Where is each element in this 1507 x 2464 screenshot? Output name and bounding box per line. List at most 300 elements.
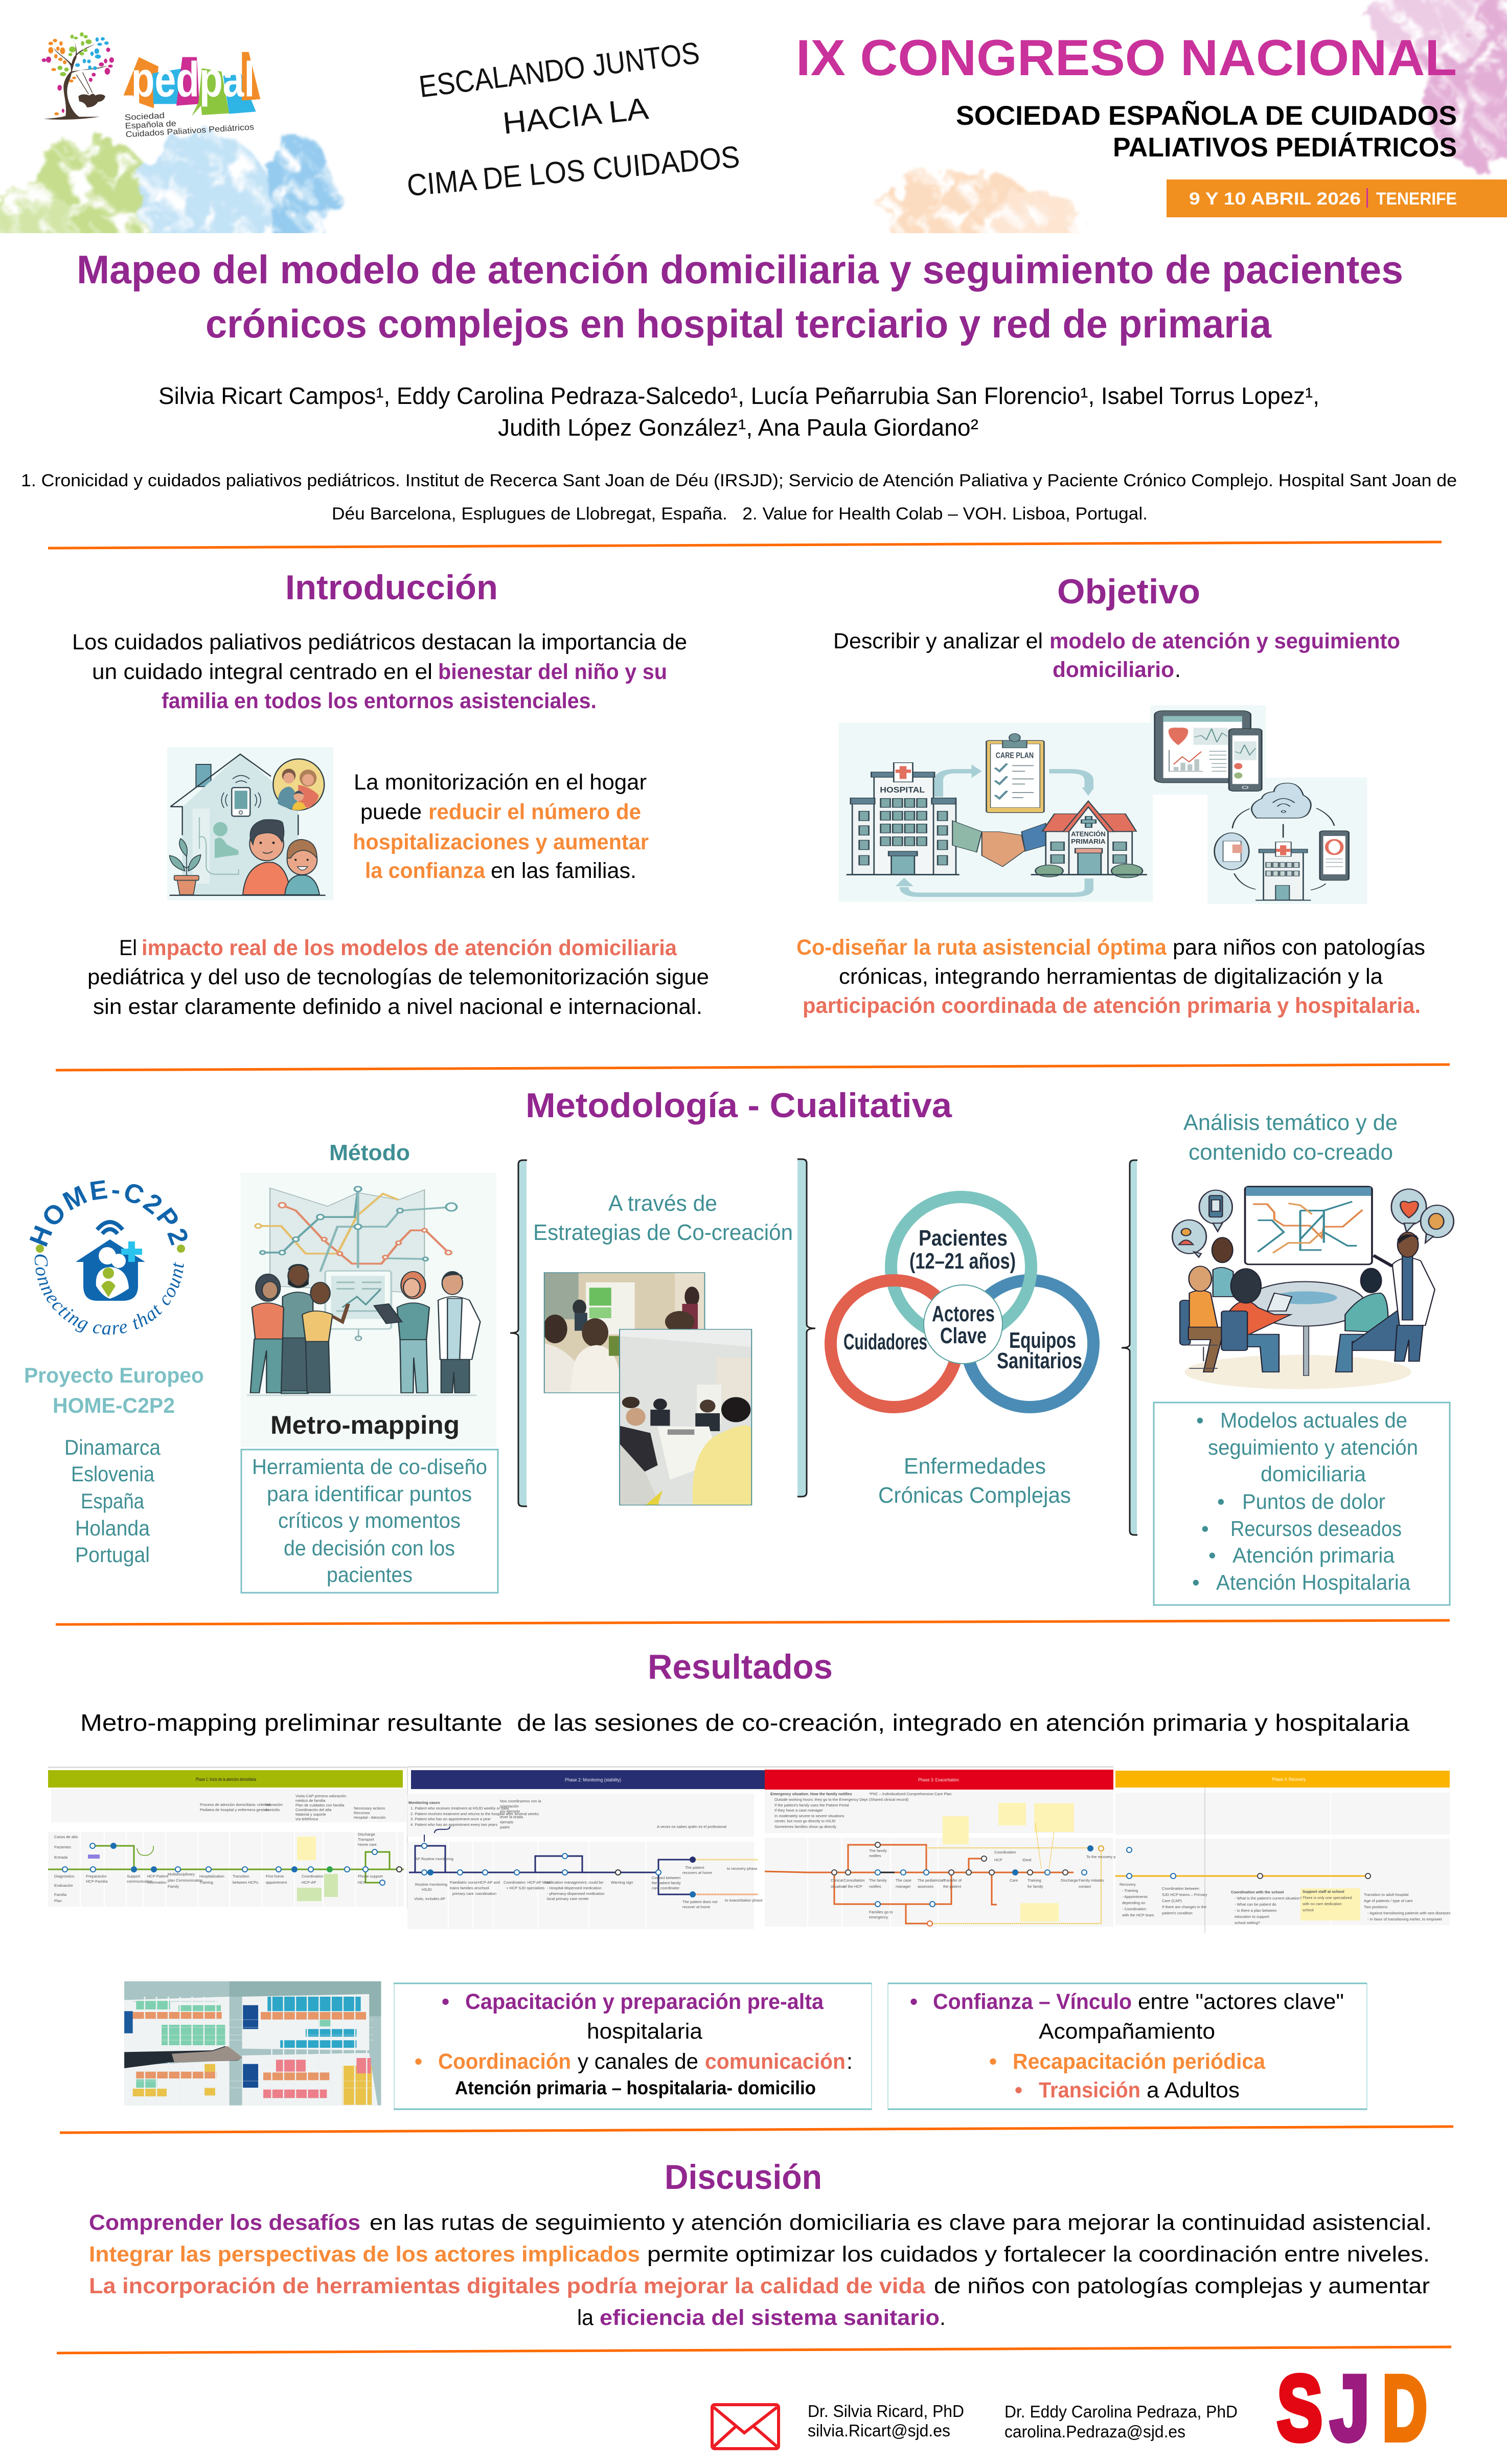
discussion text: la <box>577 2305 593 2330</box>
table <box>1245 1282 1365 1375</box>
phase 3: for family <box>1028 1884 1043 1889</box>
affiliations <box>21 471 1457 524</box>
phase 3: *PIIC – Individualized Comprehensive Care Plan <box>869 1792 951 1796</box>
phase 2: - Hospital-dispensed medication <box>547 1886 602 1890</box>
phase 1: Evaluación <box>54 1883 73 1888</box>
codesign paragraph: para niños con patologías <box>1173 935 1425 960</box>
phase 4: Transition to adult hospital <box>1364 1892 1409 1897</box>
phase 3: Emergency situation. How the family notifies <box>770 1792 852 1796</box>
box: co-design tool <box>241 1450 498 1593</box>
box: trust and recapacitation: Acompañamiento <box>1039 2019 1215 2044</box>
heading: Metodología: Metodología - Cualitativa <box>526 1086 952 1125</box>
box: training and coordination: • <box>415 2049 422 2074</box>
phase 2: 4. Patient who has an appointment every two years <box>410 1822 497 1827</box>
box: trust and recapacitation <box>888 1983 1367 2110</box>
phase 1 <box>48 1767 406 1907</box>
society name: PALIATIVOS PEDIÁTRICOS <box>1113 132 1457 163</box>
box: co-design tool: pacientes <box>327 1563 413 1587</box>
logo: Pedpal: pedpal <box>131 52 255 107</box>
care plan clipboard: CARE PLAN <box>996 752 1034 760</box>
phase 1: HCP <box>358 1880 366 1885</box>
objective statement: Describir y analizar el <box>833 629 1043 653</box>
phase 3: center, but most go directly to HSJD <box>774 1819 836 1823</box>
phase 3: notifies <box>869 1853 881 1858</box>
phase 2: 1. Patient who receives treatment at HSJD weekly or daily <box>410 1806 509 1811</box>
phase 1: between HCPs <box>233 1880 258 1885</box>
discussion text: . <box>940 2305 946 2330</box>
phase 4: - Coordination <box>1122 1907 1146 1911</box>
venn diagram: key actors: Actores <box>932 1301 995 1326</box>
logo: Pedpal: Sociedad <box>124 111 165 122</box>
chronic diseases label: Enfermedades <box>904 1454 1046 1479</box>
phase 1: Recursos <box>354 1811 370 1815</box>
phase 3: The family <box>869 1878 887 1883</box>
chronic diseases label: Crónicas Complejas <box>878 1483 1071 1508</box>
logo: HOME-C2P2 <box>30 1180 188 1335</box>
box: training and coordination: • <box>442 1990 449 2014</box>
panel: objetivo <box>796 572 1425 1018</box>
authors <box>158 382 1319 441</box>
phase 1: Necessary actions <box>354 1806 385 1811</box>
box: trust and recapacitation: Transición <box>1039 2078 1140 2103</box>
phase 2: Contact between <box>652 1875 680 1880</box>
box: analysis topics: Puntos de dolor <box>1242 1489 1385 1513</box>
logo tree <box>42 32 114 120</box>
slogan: CIMA DE LOS CUIDADOS <box>405 140 741 202</box>
panel: metodología <box>24 1086 1455 1606</box>
phase 2: The patient does not <box>682 1900 718 1904</box>
box: analysis topics <box>1154 1403 1450 1605</box>
icon: home monitoring illustration <box>167 747 333 900</box>
main title: crónicos complejos en hospital terciario y red de primaria <box>206 301 1272 346</box>
icon: envelope <box>712 2405 779 2449</box>
phase 2: Routine monitoring <box>415 1882 447 1887</box>
discussion text: La incorporación de herramientas digitales podría mejorar la calidad de vida <box>89 2274 926 2298</box>
codesign paragraph <box>796 935 1425 1018</box>
phase 2: 3. Patient who has an appointment once a year <box>410 1817 491 1821</box>
phase 1: Diagnóstico <box>54 1874 74 1879</box>
care flow arrows <box>904 771 1089 895</box>
countries list: Holanda <box>75 1516 150 1540</box>
box: analysis topics: Modelos actuales de <box>1220 1408 1407 1432</box>
box: training and coordination: Capacitación y preparación pre-alta <box>465 1990 824 2014</box>
venn diagram: key actors: (12–21 años) <box>909 1249 1016 1274</box>
phase 1: vía telefónica <box>295 1817 318 1821</box>
objective statement: . <box>1175 658 1181 682</box>
box: training and coordination: Atención primaria – hospitalaria- domicilio <box>455 2077 816 2098</box>
phase 1: Training <box>199 1880 213 1885</box>
phase 3: emergency <box>869 1915 888 1919</box>
discussion text: eficiencia del sistema sanitario <box>600 2305 940 2330</box>
intro paragraph: familia en todos los entornos asistenciales. <box>162 689 597 713</box>
phase 4: education to support <box>1235 1914 1270 1919</box>
phase 3: If the patient's family uses the Patient Portal <box>774 1803 849 1807</box>
phase 2: local primary care center <box>547 1896 589 1901</box>
impact paragraph <box>87 936 709 1019</box>
phase 1: Entrada <box>54 1855 68 1860</box>
box: trust and recapacitation: Confianza – Vínculo <box>933 1990 1132 2014</box>
box: analysis topics: • <box>1192 1570 1200 1594</box>
phase 4: Support staff at school <box>1303 1889 1344 1894</box>
intro paragraph: un cuidado integral centrado en el <box>92 660 432 684</box>
phase 4: - Is there a plan between <box>1235 1908 1277 1913</box>
phase 1: Proceso de atención domiciliaria: criterios <box>200 1802 271 1807</box>
metro-mapping label: Metro-mapping <box>270 1411 460 1439</box>
phase 1: Discharge <box>358 1832 375 1837</box>
impact paragraph: pediátrica y del uso de tecnologías de telemonitorización sigue <box>87 965 709 989</box>
phase 1: Hospital - Atención <box>354 1815 386 1820</box>
logo: Pedpal: Española de <box>125 119 176 131</box>
phase 4: Phase 4: Recovery <box>1272 1777 1306 1782</box>
phase 3: Sometimes families show up directly <box>774 1824 836 1829</box>
logo: SJD: S <box>1277 2357 1322 2460</box>
phase 2 <box>407 1766 765 1929</box>
phase 2: recovers at home <box>682 1870 712 1875</box>
phase 4: - What can be patient do <box>1235 1902 1276 1907</box>
family circle <box>273 759 324 810</box>
bracket right of strategies <box>797 1159 815 1497</box>
contact: Eddy Pedraza <box>1004 2402 1238 2441</box>
bracket analysis <box>1122 1160 1137 1535</box>
box: analysis topics: Atención Hospitalaria <box>1216 1570 1411 1594</box>
codesign paragraph: crónicas, integrando herramientas de digitalización y la <box>839 964 1383 989</box>
box: analysis topics: seguimiento y atención <box>1208 1435 1418 1459</box>
box: training and coordination: : <box>847 2049 853 2074</box>
phase 3: (Shared clinical record) <box>869 1797 909 1802</box>
phase 2: HCP-AP and <box>478 1880 500 1885</box>
phase 3: Coordination <box>994 1850 1016 1855</box>
venn diagram: key actors: Cuidadores <box>843 1329 927 1354</box>
phase 2: Paediatric nurse <box>450 1880 477 1885</box>
handshake <box>952 821 1046 867</box>
hospital building <box>851 763 956 874</box>
discussion text: permite optimizar los cuidados y fortalecer la coordinación entre niveles. <box>647 2242 1430 2267</box>
impact paragraph: sin estar claramente definido a nivel nacional e internacional. <box>93 994 702 1019</box>
box: co-design tool: de decisión con los <box>284 1536 455 1560</box>
photo 2 <box>620 1329 751 1505</box>
logo: Pedpal <box>42 32 260 139</box>
phase 1: Pediatra de hospital y enfermera gestora <box>200 1807 269 1812</box>
thematic analysis heading: Análisis temático y de <box>1183 1110 1398 1135</box>
discussion text: de niños con patologías complejas y aumentar <box>934 2274 1430 2298</box>
countries list <box>64 1435 161 1567</box>
codesign paragraph: Co-diseñar la ruta asistencial óptima <box>796 935 1167 960</box>
phase 2: padre <box>500 1825 510 1829</box>
phase 1: HCP-AP <box>302 1880 316 1885</box>
plant <box>170 839 201 895</box>
date bar <box>1167 179 1507 217</box>
phase 1: médico de familia <box>295 1798 326 1803</box>
phase 2: HSJD <box>422 1887 432 1892</box>
contact: Silvia Ricart <box>808 2402 964 2440</box>
intro paragraph: bienestar del niño y su <box>438 660 667 684</box>
phase 1: Information <box>147 1880 167 1885</box>
project name: HOME-C2P2 <box>53 1393 175 1417</box>
logo: HOME-C2P2: HOME-C2P2 <box>30 1180 188 1247</box>
screen with metro map <box>1245 1187 1372 1264</box>
monitoring text: La monitorización en el hogar <box>354 770 647 795</box>
phase 4: Care (CAP) <box>1162 1898 1182 1903</box>
box: analysis topics: Atención primaria <box>1232 1543 1395 1567</box>
authors: Silvia Ricart Campos¹, Eddy Carolina Pedraza-Salcedo¹, Lucía Peñarrubia San Florencio¹, Isabel Torrus Lopez¹, <box>158 382 1319 409</box>
phase 3: Family initiates <box>1079 1878 1104 1883</box>
box: training and coordination: y canales de <box>578 2049 698 2074</box>
phase 2: Coordination: HCP AP local <box>504 1880 551 1885</box>
phase 4: Coordination between <box>1162 1886 1199 1891</box>
box: trust and recapacitation: • <box>1015 2078 1022 2103</box>
phase 4: - Against transitioning patients with rare diseases <box>1367 1911 1451 1915</box>
slogan: HACIA LA <box>501 91 650 141</box>
venn diagram: key actors <box>831 1197 1093 1407</box>
phase 4: There is only one specialized <box>1303 1895 1352 1900</box>
main title <box>77 247 1403 346</box>
codesign paragraph: participación coordinada de atención primaria y hospitalaria. <box>803 993 1421 1018</box>
phase 3: contact <box>1079 1884 1091 1889</box>
phase 1: Visita CAP primera valoración <box>295 1794 346 1798</box>
phase 2: the patient family <box>652 1881 681 1885</box>
phase 3: Clinical <box>831 1878 843 1883</box>
box: trust and recapacitation: Recapacitación periódica <box>1013 2049 1266 2074</box>
phase 2: care coordinator <box>652 1886 680 1890</box>
phase 2: to exacerbation phase <box>725 1898 763 1903</box>
countries list: Portugal <box>75 1543 150 1567</box>
intro paragraph: Los cuidados paliativos pediátricos destacan la importancia de <box>72 630 687 654</box>
phase 2: + HCP SJD specialists <box>506 1886 544 1890</box>
project name: Proyecto Europeo <box>24 1363 204 1387</box>
workshop photos <box>543 1273 751 1505</box>
countries list: Dinamarca <box>64 1435 161 1459</box>
phase 2: Phase 2: Monitoring (stability) <box>565 1777 621 1782</box>
phase 2: The patient <box>685 1865 704 1870</box>
phase 2: Monitoring cases <box>408 1800 440 1805</box>
footer: contact <box>712 2357 1427 2460</box>
icon: hospital and primary care illustration: PRIMARIA <box>1071 838 1106 845</box>
phase 2: Nos coordinamos con la <box>500 1799 541 1803</box>
phase 3: Consultation <box>843 1878 865 1883</box>
phase 1: Family <box>168 1884 179 1889</box>
phase 1: plan Communication <box>168 1878 202 1883</box>
phase 1: Valoración <box>265 1802 283 1807</box>
box: trust and recapacitation: a Adultos <box>1147 2078 1240 2103</box>
phase 4 <box>1115 1771 1451 1933</box>
box: training and coordination: comunicación <box>705 2049 846 2074</box>
phase 3: The family <box>869 1848 887 1853</box>
contact: Eddy Pedraza: carolina.Pedraza@sjd.es <box>1004 2422 1185 2441</box>
phase 1: Multidisciplinary <box>168 1872 195 1877</box>
slogan <box>405 35 741 202</box>
project name <box>24 1363 204 1417</box>
contact: Silvia Ricart: Dr. Silvia Ricard, PhD <box>808 2402 964 2421</box>
care plan clipboard <box>986 734 1044 812</box>
icon: hospital and primary care illustration: ATENCIÓN <box>1071 830 1106 838</box>
phase 3 <box>765 1766 1124 1927</box>
intro paragraph <box>72 630 687 713</box>
phase 3: the patient <box>943 1884 962 1889</box>
co-creation strategies: A través de <box>608 1191 717 1216</box>
box: co-design tool: críticos y momentos <box>278 1508 461 1532</box>
box: analysis topics: Recursos deseados <box>1230 1517 1402 1541</box>
phase 2: coordination <box>475 1891 496 1896</box>
countries list: España <box>81 1489 145 1513</box>
phase 4: If there are changes in the <box>1162 1905 1206 1909</box>
icon: metro-mapping illustration <box>241 1173 496 1448</box>
heading: Objetivo: Objetivo <box>1057 572 1200 611</box>
phase 4: Two positions: <box>1364 1905 1388 1909</box>
venn diagram: key actors: Clave <box>940 1323 987 1348</box>
phase 3: Training <box>1028 1878 1041 1883</box>
box: training and coordination <box>394 1983 872 2110</box>
phase 1: Support <box>127 1874 141 1879</box>
affiliations: 1. Cronicidad y cuidados paliativos pediátricos. Institut de Recerca Sant Joan de Déu (IRSJD); Servicio de Atención Paliativa y Paciente Crónico Complejo. Hospital Sant Joan de <box>21 471 1457 490</box>
date bar: TENERIFE <box>1376 189 1457 209</box>
phase 1: Home care <box>358 1842 377 1847</box>
group of people <box>250 1264 480 1393</box>
authors: Judith López González¹, Ana Paula Giordano² <box>498 414 978 441</box>
chart: metro map <box>48 1766 1451 1933</box>
slogan: ESCALANDO JUNTOS <box>417 35 701 104</box>
phase 4: - Training <box>1122 1888 1138 1893</box>
phase 2: Medication management, could be: <box>544 1880 604 1885</box>
objective statement: modelo de atención y seguimiento <box>1049 629 1400 653</box>
workshop wall photo <box>124 1981 381 2106</box>
photo 1 <box>543 1273 704 1393</box>
heading: Resultados: Resultados <box>648 1647 833 1686</box>
objective statement <box>833 629 1400 682</box>
bracket left <box>510 1160 527 1506</box>
phase 3: notifies <box>869 1884 881 1889</box>
phase 1: Material y soporte <box>295 1812 326 1817</box>
phase 3: of the HCP <box>843 1884 862 1889</box>
phase 1: Casos de alta <box>54 1835 78 1839</box>
phase 3: assesses <box>918 1884 934 1889</box>
countries list: Eslovenia <box>71 1462 155 1486</box>
icon: hospital and primary care illustration <box>839 705 1367 904</box>
discussion text: en las rutas de seguimiento y atención domiciliaria es clave para mejorar la continuidad asistencial. <box>370 2210 1432 2235</box>
logo: SJD: J <box>1330 2357 1369 2460</box>
box: co-design tool: Herramienta de co-diseño <box>252 1455 487 1479</box>
phase 2: Warning sign <box>611 1880 633 1885</box>
phase 1: Transition <box>233 1874 249 1879</box>
adult and child <box>243 820 319 895</box>
header banner <box>0 0 1507 233</box>
phase 4: school setting? <box>1235 1920 1260 1925</box>
phase 3: situation <box>831 1884 845 1889</box>
phase 4: - In favor of transitioning earlier, to empower <box>1367 1917 1443 1922</box>
phase 1: Phone support <box>358 1874 383 1879</box>
objective statement: domiciliario <box>1053 658 1174 682</box>
phase 4: SJD HCP teams – Primary <box>1162 1892 1207 1897</box>
seated and standing team <box>1180 1232 1435 1372</box>
icon: hospital and primary care illustration: HOSPITAL <box>880 785 925 795</box>
monitoring text: en las familias. <box>491 858 636 883</box>
phase 1: communication <box>127 1879 152 1884</box>
box: training and coordination: Coordinación <box>438 2049 571 2074</box>
phase 4: - Appointments <box>1122 1894 1148 1899</box>
monitoring text: la confianza <box>365 858 486 883</box>
phase 1: Transport <box>358 1837 375 1842</box>
panel: resultados <box>48 1647 1451 2110</box>
date bar: 9 Y 10 ABRIL 2026 <box>1189 189 1361 209</box>
phase 3: To the recovery phase <box>1086 1855 1124 1859</box>
phase 2: ejemplo <box>500 1820 513 1824</box>
phase 3: The case <box>896 1878 911 1883</box>
co-creation strategies: Estrategias de Co-creación <box>533 1220 793 1245</box>
society name: SOCIEDAD ESPAÑOLA DE CUIDADOS <box>956 100 1457 131</box>
phase 4: Recovery <box>1120 1882 1136 1887</box>
phase 2: AP Routine monitoring <box>415 1857 453 1861</box>
affiliations: Déu Barcelona, Esplugues de Llobregat, España. 2. Value for Health Colab – VOH. Lisboa, Portugal. <box>332 504 1148 524</box>
box: trust and recapacitation: • <box>989 2049 997 2074</box>
phase 2: Visits, includes AP <box>414 1896 445 1901</box>
box: analysis topics: • <box>1201 1517 1209 1541</box>
phase 3: Care <box>1010 1878 1018 1883</box>
discussion text: Integrar las perspectivas de los actores implicados <box>89 2242 640 2267</box>
phase 4: Coordination with the school <box>1231 1890 1284 1894</box>
phase 4: - What is the patient's current situation? <box>1235 1896 1302 1901</box>
thematic analysis heading <box>1183 1110 1398 1165</box>
speech bubbles <box>1172 1189 1454 1257</box>
society name <box>956 100 1457 163</box>
phase 2: por ejemplo <box>500 1809 520 1814</box>
icon: team around metro map <box>1172 1187 1454 1389</box>
phase 1: Pacientes <box>54 1845 71 1849</box>
primary care building <box>1035 801 1143 878</box>
contact: Eddy Pedraza: Dr. Eddy Carolina Pedraza, PhD <box>1004 2402 1238 2421</box>
box: analysis topics: • <box>1217 1489 1225 1513</box>
impact paragraph: impacto real de los modelos de atención domiciliaria <box>142 936 677 960</box>
phase 1: HCP-Familia <box>86 1879 108 1884</box>
cloud network <box>1215 783 1349 900</box>
venn diagram: key actors: Sanitarios <box>997 1348 1082 1373</box>
phase 4: with no care dedication <box>1302 1902 1342 1906</box>
phase 1: domicilio <box>265 1807 280 1812</box>
monitoring text <box>353 770 649 883</box>
phase 4: Age of patients / type of care <box>1364 1898 1412 1903</box>
thematic analysis heading: contenido co-creado <box>1189 1140 1393 1165</box>
box: analysis topics: • <box>1208 1543 1216 1567</box>
box: trust and recapacitation: • <box>910 1990 918 2014</box>
phase 2: trains families at <box>450 1886 478 1890</box>
panel: introducción <box>72 568 709 1019</box>
phase 3: Discharge <box>1061 1878 1078 1883</box>
phase 2: - pharmacy-dispensed medication <box>547 1891 605 1896</box>
phase 3: The pediatrician <box>918 1878 945 1883</box>
phase 4: depending on <box>1122 1901 1145 1905</box>
phase 3: HCP <box>994 1858 1002 1862</box>
phase 4: with the HCP team <box>1122 1913 1154 1917</box>
phase 3: Phase 3: Exacerbation <box>918 1777 959 1782</box>
phase 3: manager <box>896 1884 911 1889</box>
venn diagram: key actors: Pacientes <box>919 1226 1008 1251</box>
phase 2: primary care <box>452 1891 474 1896</box>
conference title: IX CONGRESO NACIONAL <box>796 29 1457 86</box>
phase 4: school <box>1303 1908 1314 1912</box>
phase 1: Hospitalization <box>199 1874 224 1879</box>
phase 1: Plan <box>54 1898 62 1903</box>
phase 1: First home <box>266 1874 284 1879</box>
phase 1: Coordinación del alta <box>295 1807 332 1812</box>
impact paragraph: El <box>119 936 137 960</box>
phase 3: In moderately severe to severe situations <box>774 1814 844 1818</box>
box: co-design tool: para identificar puntos <box>267 1482 472 1506</box>
panel: discusión <box>89 2158 1432 2330</box>
box: training and coordination: hospitalaria <box>587 2019 702 2044</box>
monitoring text: puede <box>360 800 422 824</box>
box: analysis topics: • <box>1196 1408 1204 1432</box>
phase 1: Preparación <box>86 1874 106 1879</box>
phase 1: Plan de cuidados con familia <box>295 1803 345 1807</box>
phase 4: patient's condition <box>1162 1911 1193 1915</box>
